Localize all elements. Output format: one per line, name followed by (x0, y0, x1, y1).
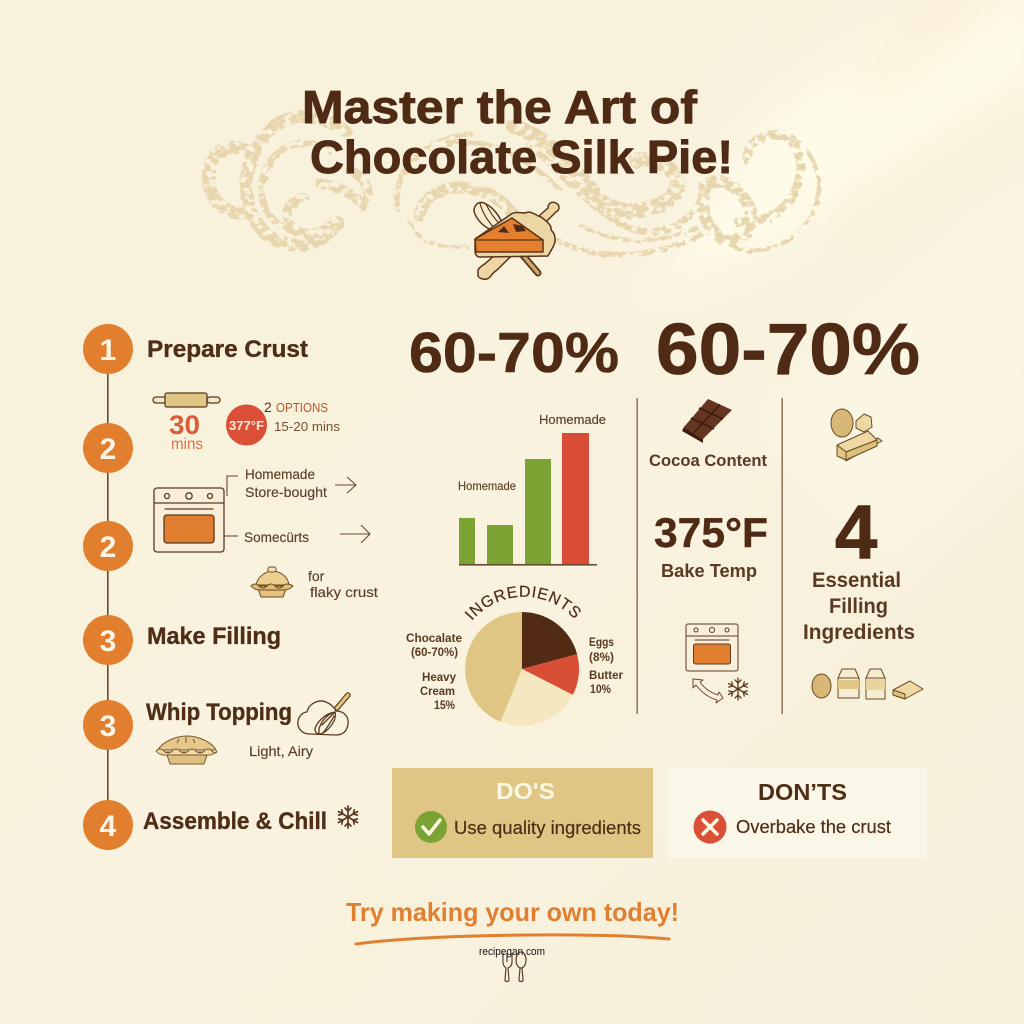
badge: temperature: 377°F (229, 418, 264, 433)
panel: don'ts: Overbake the crust (736, 817, 891, 837)
title: Master the Art of (302, 81, 698, 133)
pie labels left: Cream (420, 684, 455, 698)
text: for flaky crust: for (308, 568, 325, 584)
timeline line (107, 360, 109, 815)
stat: 375°F: 375°F (654, 509, 768, 556)
panel: do's: DO'S (496, 778, 555, 804)
step 3 badge (83, 615, 133, 665)
pie labels left: Heavy (422, 670, 456, 684)
stat: 30 mins: 30 (169, 410, 200, 440)
icon: chocolate bar (682, 399, 732, 443)
stat: 60-70% right: 60-70% (656, 310, 920, 390)
pie labels right: 10% (590, 682, 611, 696)
icon: rolling pin (153, 393, 220, 407)
crust options connectors (224, 476, 238, 536)
icon: pie slice with whisk and rolling pin (474, 202, 559, 279)
text: for flaky crust: flaky crust (310, 584, 378, 600)
pie labels right: Eggs (589, 635, 614, 649)
icon: fork and spoon (503, 952, 526, 982)
text: essential filling ingredients (803, 569, 915, 644)
step 1 badge: 1 (100, 334, 116, 367)
step 2 badge: 2 (100, 433, 116, 466)
underline stroke (356, 935, 669, 944)
pie labels left: (60-70%) (411, 645, 458, 659)
badge: temperature (226, 404, 267, 446)
icon: cloud and whisk (298, 695, 348, 735)
text: options and time (264, 399, 341, 434)
column divider (782, 398, 783, 714)
text: for flaky crust (308, 568, 378, 600)
pie labels left: Chocalate (406, 631, 462, 645)
step 1 badge (83, 324, 133, 374)
icon: oven (154, 488, 224, 552)
stat: 4: 4 (835, 490, 877, 575)
panel: don'ts (668, 768, 927, 858)
icon: covered pie dish (251, 567, 293, 597)
icon: eggs and butter (831, 409, 882, 461)
text: essential filling ingredients: Filling (829, 595, 888, 618)
icon: cross mark (694, 810, 726, 844)
step 4 heading: Assemble & Chill (143, 808, 327, 835)
title: Chocolate Silk Pie! (310, 131, 733, 183)
arrow (340, 525, 370, 543)
step 2 badge (83, 423, 133, 473)
bar chart (458, 412, 606, 566)
text: crust options: Somecürts (244, 529, 309, 545)
panel: don'ts: DON’TS (758, 779, 847, 805)
pie labels left (406, 631, 462, 712)
step 3 heading: Make Filling (147, 623, 281, 650)
icon: cream carton (866, 669, 885, 699)
panel: do's (392, 768, 653, 858)
stat: 30 mins: mins (171, 436, 203, 453)
panel: do's: Use quality ingredients (454, 818, 641, 838)
text: bake temp: Bake Temp (661, 561, 757, 581)
stat: 30 mins (169, 410, 203, 453)
pie labels right (589, 635, 623, 696)
text: website: recipegan.com (479, 946, 545, 958)
text: cocoa content: Cocoa Content (649, 451, 767, 470)
icon: whole pie (156, 736, 217, 764)
bar chart: Homemade (458, 479, 516, 493)
step 3 badge: 3 (100, 710, 116, 743)
step 3 badge (83, 700, 133, 750)
pie labels right: (8%) (589, 650, 614, 664)
icon: check mark (415, 811, 447, 843)
step 2 badge (83, 521, 133, 571)
step 1 heading: Prepare Crust (147, 336, 308, 363)
call to action: Try making your own today! (346, 897, 679, 927)
text: options and time: 2 (264, 399, 272, 415)
arrow (335, 477, 356, 493)
text: light, airy: Light, Airy (249, 743, 313, 759)
stat: 60-70% left: 60-70% (409, 321, 619, 385)
icon: snowflake (727, 678, 749, 700)
step 3 badge: 3 (100, 625, 116, 658)
text: essential filling ingredients: Ingredients (803, 621, 915, 644)
pie chart: ingredients (406, 586, 623, 726)
text: options and time: 15-20 mins (274, 419, 341, 434)
icon: egg (812, 674, 831, 698)
title (302, 81, 733, 183)
text: crust options: Homemade (245, 466, 315, 482)
step 4 badge: 4 (100, 810, 117, 843)
icon: butter (893, 681, 923, 699)
column divider (636, 398, 638, 714)
pie chart: ingredients: INGREDIENTS (464, 586, 581, 620)
icon: cooling arrow (693, 679, 723, 703)
decorative swirl behind title (208, 116, 818, 254)
text: crust options (244, 466, 327, 545)
text: crust options: Store-bought (245, 484, 327, 500)
icon: small oven (686, 624, 738, 671)
text: essential filling ingredients: Essential (812, 569, 901, 592)
step 4 badge (83, 800, 133, 850)
pie labels left: 15% (434, 698, 455, 712)
icon: snowflake (337, 806, 359, 828)
step 2 badge: 2 (100, 531, 116, 564)
step heading: whip topping: Whip Topping (146, 699, 292, 726)
icon: milk carton (838, 669, 859, 698)
pie labels right: Butter (589, 668, 623, 682)
text: options and time: OPTIONS (276, 401, 328, 415)
bar chart: Homemade (539, 412, 606, 427)
